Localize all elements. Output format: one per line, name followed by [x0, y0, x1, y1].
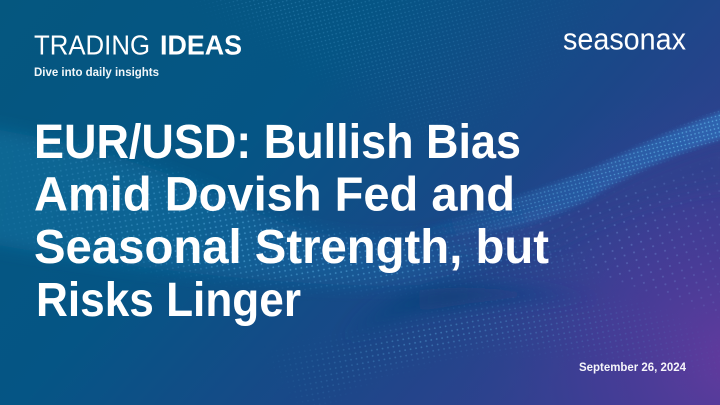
main title: Risks Linger	[36, 274, 301, 327]
main title	[34, 116, 549, 327]
header: trading ideas	[34, 30, 242, 60]
header: trading ideas: TRADING	[34, 30, 150, 60]
main title: EUR/USD: Bullish Bias	[34, 116, 521, 169]
logo: seasonax: seasonax	[563, 22, 686, 56]
main title: Seasonal Strength, but	[34, 221, 549, 274]
main title: Amid Dovish Fed and	[34, 168, 515, 222]
subtitle: Dive into daily insights	[34, 67, 159, 79]
date: September 26, 2024	[579, 362, 687, 374]
header: trading ideas: IDEAS	[160, 30, 242, 60]
